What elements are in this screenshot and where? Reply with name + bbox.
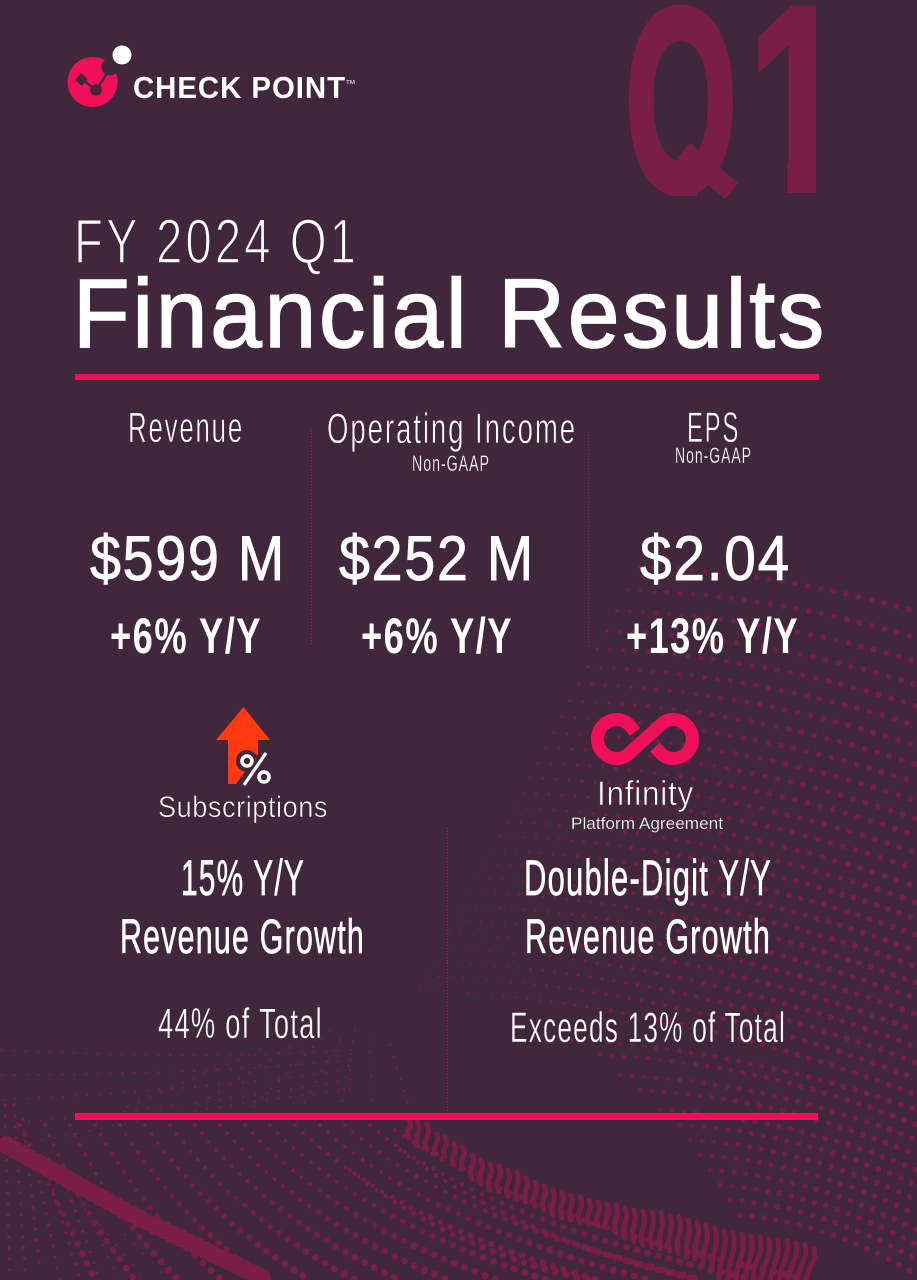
bottom fan of dotted lines [20, 1125, 812, 1280]
growth line: 15% Y/Y [181, 850, 305, 906]
column dividers [312, 430, 588, 1113]
panel: operating income [327, 405, 577, 664]
growth: +6% Y/Y [361, 608, 513, 664]
panel: revenue [90, 404, 286, 664]
background dot pattern [0, 567, 917, 1280]
icon: up arrow with percent [216, 707, 270, 785]
note: Non-GAAP [675, 443, 752, 468]
heading: Revenue [128, 404, 244, 452]
growth line: Double-Digit Y/Y [524, 850, 772, 906]
heading: EPS [687, 404, 740, 452]
panel: EPS [626, 404, 799, 664]
icon label: Infinity [597, 775, 694, 813]
wave streaks [408, 1120, 815, 1280]
title [73, 207, 827, 368]
bottom rule [75, 1113, 818, 1120]
growth line 2: Revenue Growth [120, 911, 365, 964]
logo: Check Point: TM [346, 80, 355, 86]
diagonal band [6, 1145, 267, 1280]
title line 2: Financial Results [73, 259, 827, 368]
value: $2.04 [640, 524, 791, 594]
growth line 2: Revenue Growth [525, 911, 771, 964]
logo: Check Point [68, 46, 355, 107]
title line 1: FY 2024 Q1 [74, 207, 359, 277]
lower-left cluster of dots [5, 1105, 100, 1280]
growth: +6% Y/Y [110, 608, 262, 664]
note: Non-GAAP [412, 451, 490, 476]
icon label: Subscriptions [158, 791, 328, 824]
share of total: 44% of Total [158, 1000, 323, 1048]
panel: infinity [510, 720, 786, 1052]
logo: Check Point: CHECK POINT [133, 70, 346, 105]
upper-left faint fan of small dots [0, 1030, 410, 1150]
top rule [75, 374, 819, 380]
panel: subscriptions [120, 707, 365, 1048]
heading: Operating Income [327, 405, 577, 453]
value: $599 M [90, 524, 286, 594]
value: $252 M [339, 524, 535, 594]
icon sublabel: Platform Agreement [571, 815, 723, 833]
growth: +13% Y/Y [626, 608, 799, 664]
icon: infinity [598, 720, 692, 758]
